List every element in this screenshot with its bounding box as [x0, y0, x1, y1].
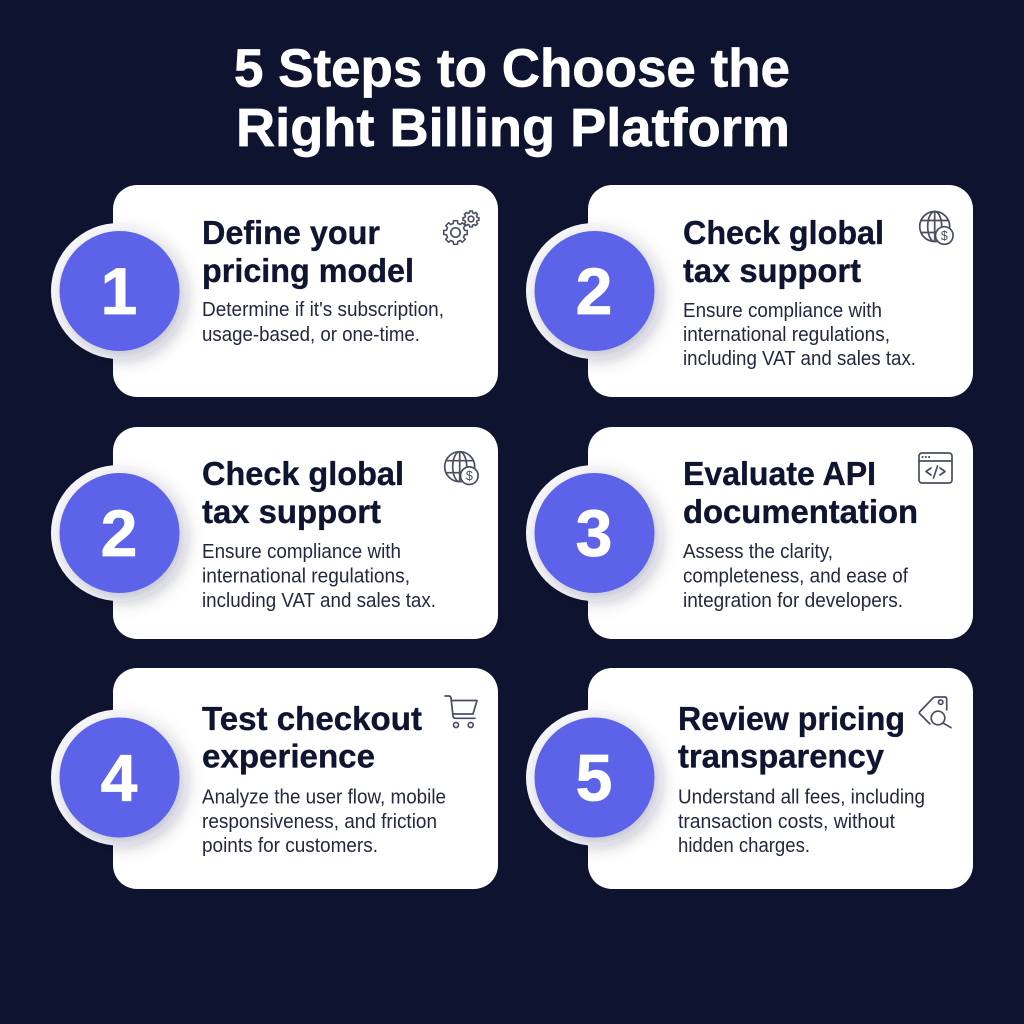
step 4 description: Analyze the user flow, mobile [202, 786, 446, 808]
step 5 description: transaction costs, without [678, 810, 895, 833]
panel: step 5 review pricing transparency [526, 668, 973, 889]
step 4 description [202, 786, 446, 857]
step 4 heading: Test checkout [202, 701, 422, 738]
number badge 2: 2 [576, 254, 612, 328]
repeated step 2 description [202, 540, 436, 612]
number badge 3 [526, 465, 662, 601]
step 5 description [678, 786, 925, 857]
number badge 3: 3 [576, 496, 612, 570]
number badge 5: 5 [576, 740, 612, 814]
step 2 heading: tax support [683, 253, 861, 290]
icon: price tag with magnifier [919, 697, 951, 728]
step 5 heading [678, 701, 905, 776]
title [234, 38, 790, 158]
icon: globe with dollar repeated: $ [466, 469, 473, 483]
step 3 description: integration for developers. [683, 589, 903, 612]
step 1 heading: pricing model [202, 253, 414, 290]
step 2 heading [683, 215, 884, 290]
repeated step 2 description: Ensure compliance with [202, 540, 401, 563]
icon: gears [444, 211, 479, 244]
icon: globe with dollar: $ [941, 229, 948, 243]
icon: globe with dollar [920, 212, 953, 244]
number badge 2 repeated: 2 [101, 496, 137, 570]
step 5 description: Understand all fees, including [678, 786, 925, 808]
number badge 1 [51, 223, 187, 359]
number badge 2 [526, 223, 662, 359]
step 3 heading: Evaluate API [683, 456, 876, 493]
title: 5 Steps to Choose the [234, 38, 790, 98]
number badge 5 [526, 710, 662, 846]
panel: step 2 check global tax support [526, 185, 973, 397]
step 4 heading [202, 701, 422, 776]
repeated step 2 heading: tax support [202, 494, 381, 531]
repeated step 2 description: international regulations, [202, 564, 410, 588]
panel: step 1 define your pricing model [51, 185, 498, 397]
title: Right Billing Platform [236, 98, 790, 158]
step 1 description [202, 298, 444, 346]
step 2 description: Ensure compliance with [683, 299, 882, 322]
icon: shopping cart [445, 696, 477, 728]
number badge 4: 4 [101, 740, 138, 814]
repeated step 2 description: including VAT and sales tax. [202, 589, 436, 612]
panel: step 3 evaluate API documentation [526, 427, 973, 639]
step 1 description: Determine if it's subscription, [202, 298, 444, 321]
step 3 heading [683, 456, 918, 531]
repeated step 2 heading [202, 456, 404, 531]
panel: step 4 test checkout experience [51, 668, 498, 889]
step 4 description: points for customers. [202, 834, 378, 857]
icon: globe with dollar repeated [445, 452, 478, 485]
step 3 description [683, 540, 908, 612]
repeated step 2 heading: Check global [202, 456, 404, 493]
step 4 heading: experience [202, 738, 375, 776]
step 1 description: usage-based, or one-time. [202, 323, 420, 346]
icon: code window [919, 453, 952, 483]
step 3 heading: documentation [683, 494, 918, 531]
number badge 2 repeated [51, 465, 187, 601]
step 2 description: international regulations, [683, 323, 890, 346]
step 3 description: Assess the clarity, [683, 540, 833, 563]
number badge 1: 1 [101, 254, 137, 328]
step 4 description: responsiveness, and friction [202, 810, 437, 833]
number badge 4 [51, 710, 187, 846]
step 2 heading: Check global [683, 215, 884, 252]
step 5 heading: Review pricing [678, 701, 905, 738]
step 3 description: completeness, and ease of [683, 564, 908, 588]
step 1 heading [202, 215, 414, 290]
step 1 heading: Define your [202, 215, 380, 252]
panel: step 2 repeated check global tax support [51, 427, 498, 639]
step 5 description: hidden charges. [678, 834, 810, 857]
step 2 description [683, 299, 916, 370]
step 2 description: including VAT and sales tax. [683, 347, 916, 370]
step 5 heading: transparency [678, 738, 884, 776]
